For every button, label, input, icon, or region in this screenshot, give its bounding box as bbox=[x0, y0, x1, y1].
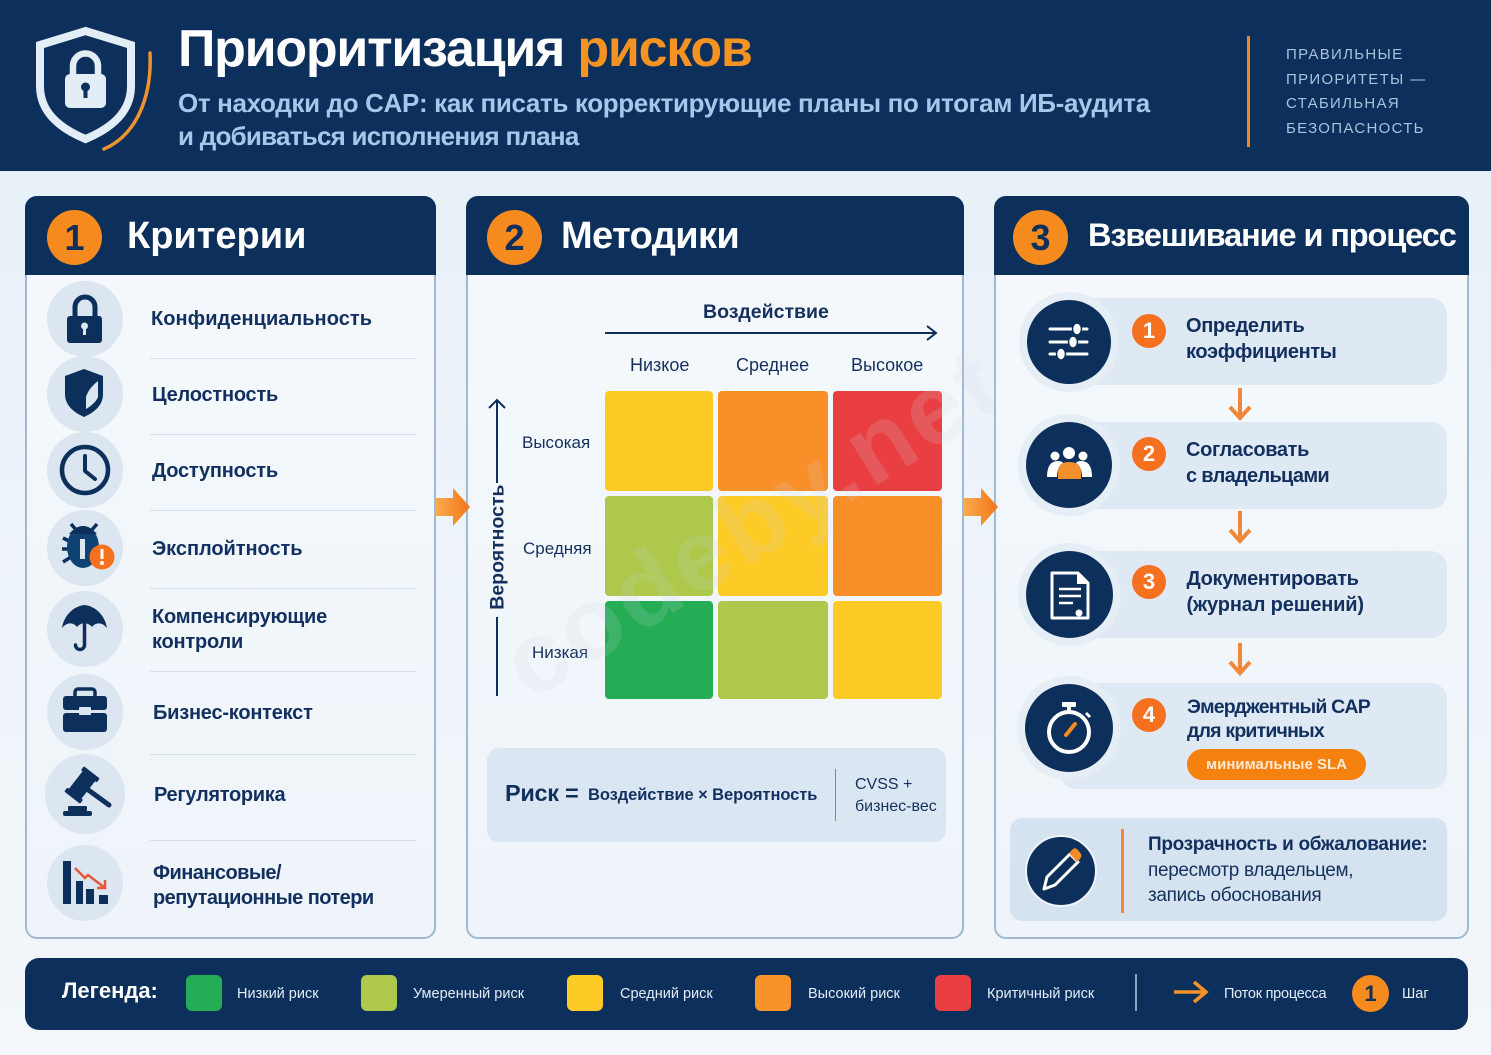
criterion: losses bbox=[47, 845, 374, 921]
step text bbox=[1186, 568, 1364, 616]
impact axis: Воздействие bbox=[703, 301, 829, 323]
icon: shield bbox=[47, 356, 123, 432]
step 4 bbox=[1017, 676, 1447, 789]
title: Приоритизация рисков bbox=[178, 20, 752, 78]
criterion: exploitability bbox=[47, 510, 303, 586]
criterion: regulation bbox=[45, 754, 286, 834]
icon: flow arrow bbox=[1173, 979, 1209, 1005]
header band bbox=[0, 0, 1491, 171]
icon: falling bars bbox=[47, 845, 123, 921]
risk matrix: Средняя bbox=[523, 539, 592, 558]
heading: methods bbox=[487, 210, 739, 265]
legend step badge bbox=[1352, 975, 1389, 1012]
legend items: Средний риск bbox=[620, 986, 713, 1002]
accent bar bbox=[1121, 829, 1124, 913]
risk matrix bbox=[486, 301, 942, 699]
risk matrix: Среднее bbox=[736, 355, 809, 375]
legend step badge: 1 bbox=[1364, 981, 1377, 1006]
legend items bbox=[180, 970, 1440, 1016]
step number: 2 bbox=[1143, 441, 1155, 466]
arrow: step 3 to 4 bbox=[1228, 643, 1252, 676]
label: контроли bbox=[152, 630, 243, 652]
arrow: methods to process bbox=[963, 488, 998, 526]
legend items: Шаг bbox=[1402, 986, 1429, 1002]
tagline: ПРАВИЛЬНЫЕ bbox=[1286, 46, 1403, 63]
legend items: Высокий риск bbox=[808, 986, 900, 1002]
icon: bug with warning bbox=[47, 510, 123, 586]
step text: Согласовать bbox=[1186, 439, 1309, 461]
step text: с владельцами bbox=[1186, 464, 1329, 486]
step 1 bbox=[1019, 292, 1447, 392]
legend bar bbox=[25, 958, 1468, 1030]
step number: 1 bbox=[1143, 318, 1155, 343]
formula: Риск = bbox=[505, 780, 578, 806]
step text: Эмерджентный CAP bbox=[1187, 696, 1370, 718]
step number bbox=[1132, 698, 1166, 732]
callout text: Прозрачность и обжалование: bbox=[1148, 834, 1427, 855]
legend items: Умеренный риск bbox=[413, 986, 524, 1002]
step text bbox=[1186, 439, 1329, 486]
impact axis bbox=[605, 301, 938, 341]
label: Доступность bbox=[152, 460, 278, 482]
legend title: Легенда: bbox=[62, 978, 158, 1003]
panel: methods bbox=[466, 196, 964, 939]
step text: для критичных bbox=[1187, 720, 1324, 742]
tagline: БЕЗОПАСНОСТЬ bbox=[1286, 120, 1425, 136]
step text: Документировать bbox=[1186, 568, 1359, 590]
risk matrix: Низкая bbox=[532, 643, 588, 662]
icon: team bbox=[1026, 422, 1112, 508]
step number bbox=[1132, 437, 1166, 471]
panel: criteria bbox=[25, 196, 436, 939]
tagline: СТАБИЛЬНАЯ bbox=[1286, 95, 1400, 112]
icon: gavel bbox=[45, 754, 125, 834]
label: Целостность bbox=[152, 384, 278, 406]
criterion: compensating controls bbox=[47, 591, 327, 667]
heading: criteria: Критерии bbox=[127, 215, 306, 257]
heading: weighting and process bbox=[1013, 210, 1456, 265]
criterion: business context bbox=[47, 674, 313, 750]
criterion: confidentiality bbox=[47, 281, 372, 356]
icon: padlock bbox=[47, 281, 123, 357]
step number: 4 bbox=[1143, 702, 1155, 727]
label: Регуляторика bbox=[154, 784, 285, 806]
label: Компенсирующие bbox=[152, 606, 327, 628]
SLA badge: минимальные SLA bbox=[1206, 756, 1347, 773]
icon: sliders bbox=[1027, 300, 1111, 384]
step 3 bbox=[1018, 543, 1447, 646]
legend items: Критичный риск bbox=[987, 986, 1094, 1002]
callout text bbox=[1148, 834, 1427, 906]
icon: pencil bbox=[1025, 835, 1097, 907]
heading: criteria bbox=[47, 210, 306, 265]
icon: umbrella bbox=[47, 591, 123, 667]
watermark: codeby.net bbox=[483, 326, 1022, 720]
tagline bbox=[1286, 46, 1426, 136]
step text: коэффициенты bbox=[1186, 340, 1337, 362]
icon: briefcase bbox=[47, 674, 123, 750]
callout text: пересмотр владельцем, bbox=[1148, 860, 1353, 880]
formula note: CVSS + bbox=[855, 776, 912, 793]
formula note bbox=[855, 776, 937, 815]
likelihood axis bbox=[486, 398, 508, 696]
icon: stopwatch bbox=[1025, 684, 1113, 772]
arrow: step 1 to 2 bbox=[1228, 388, 1252, 421]
subtitle: и добиваться исполнения плана bbox=[178, 121, 579, 151]
heading: weighting and process: 3 bbox=[1030, 217, 1051, 258]
risk matrix: Высокое bbox=[851, 355, 923, 375]
icon: clock bbox=[47, 432, 123, 508]
likelihood axis: Вероятность bbox=[486, 484, 508, 610]
step 2 bbox=[1018, 414, 1447, 516]
risk formula bbox=[487, 748, 946, 842]
panel: weighting and process bbox=[994, 196, 1469, 939]
step text: (журнал решений) bbox=[1186, 594, 1364, 616]
label bbox=[153, 862, 374, 909]
legend items: Поток процесса bbox=[1224, 986, 1326, 1002]
step text bbox=[1187, 696, 1370, 742]
legend items: Низкий риск bbox=[237, 986, 319, 1002]
formula note: бизнес-вес bbox=[855, 798, 937, 815]
header divider bbox=[1247, 36, 1250, 147]
label: Бизнес-контекст bbox=[153, 702, 313, 724]
arrow: step 2 to 3 bbox=[1228, 511, 1252, 544]
label: репутационные потери bbox=[153, 887, 374, 909]
criteria list bbox=[45, 281, 416, 921]
SLA badge bbox=[1187, 749, 1366, 780]
step text: Определить bbox=[1186, 315, 1304, 337]
label: Эксплойтность bbox=[152, 538, 303, 560]
label bbox=[152, 606, 327, 652]
step text bbox=[1186, 315, 1337, 362]
subtitle: От находки до CAP: как писать корректирующие планы по итогам ИБ-аудита bbox=[178, 88, 1150, 118]
heading: methods: Методики bbox=[561, 215, 739, 257]
matrix cells bbox=[605, 391, 713, 491]
row labels: Высокая bbox=[522, 433, 590, 452]
tagline: ПРИОРИТЕТЫ — bbox=[1286, 70, 1426, 88]
column labels: Низкое bbox=[630, 355, 689, 375]
subtitle bbox=[178, 88, 1150, 151]
criterion: availability bbox=[47, 432, 278, 508]
arrow: criteria to methods bbox=[435, 488, 470, 526]
heading: methods: 2 bbox=[504, 217, 525, 258]
heading: weighting and process: Взвешивание и процесс bbox=[1088, 217, 1456, 253]
step number: 3 bbox=[1143, 569, 1155, 594]
callout text: запись обоснования bbox=[1148, 885, 1321, 906]
risk formula: Воздействие × Вероятность bbox=[588, 786, 817, 804]
label: Конфиденциальность bbox=[151, 308, 372, 330]
criterion: integrity bbox=[47, 356, 278, 432]
step number bbox=[1132, 314, 1166, 348]
icon: document bbox=[1026, 551, 1113, 638]
heading: criteria: 1 bbox=[64, 217, 85, 258]
icon: shield with padlock bbox=[36, 26, 152, 151]
step number bbox=[1132, 565, 1166, 599]
callout: transparency and appeal bbox=[1010, 818, 1447, 921]
label: Финансовые/ bbox=[153, 862, 281, 884]
